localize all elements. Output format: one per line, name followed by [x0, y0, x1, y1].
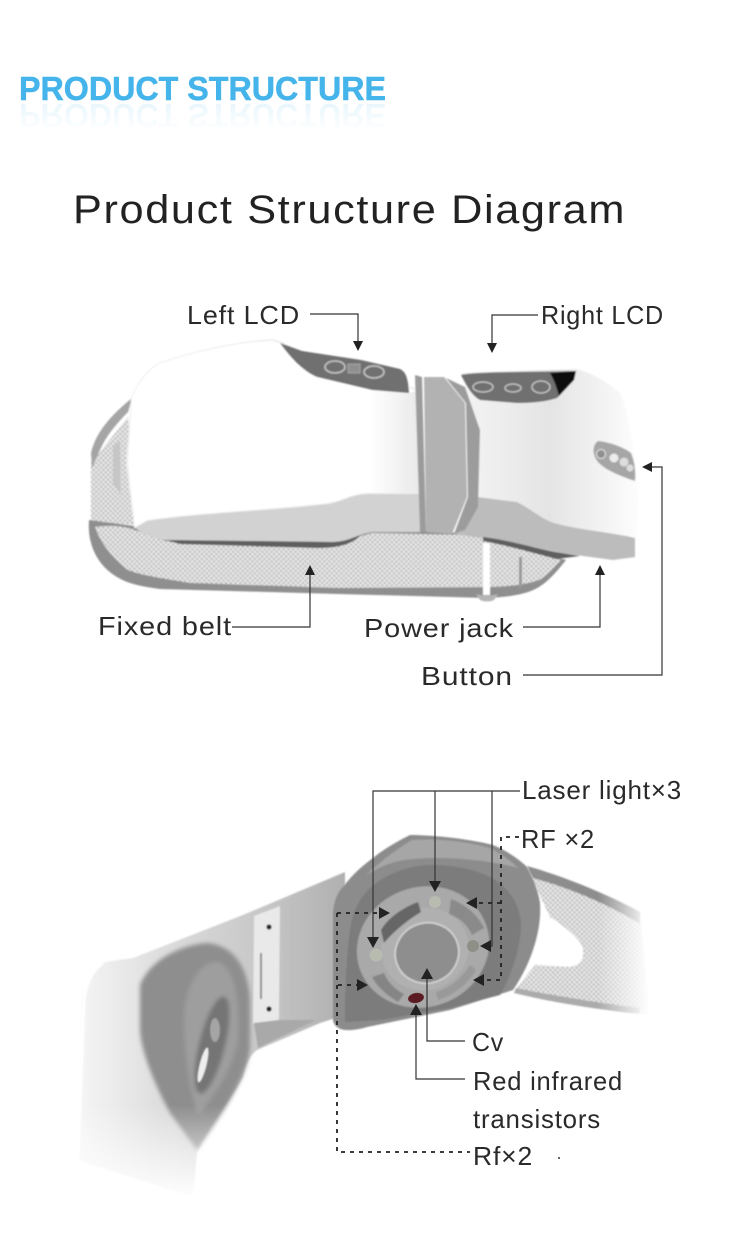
- dark gap under rim: [165, 535, 361, 548]
- heading: Product Structure Diagram: Product Structure Diagram: [73, 188, 626, 232]
- diagram: device front view: [89, 340, 639, 602]
- left housing band: [77, 872, 345, 1197]
- arrow: Fixed belt: [232, 572, 310, 627]
- centre band: [415, 375, 480, 534]
- title reflection: PRODUCT STRUCTURE: [19, 97, 386, 134]
- icon: laser lights: [370, 896, 479, 962]
- label: Rf×2: Rf×2: [473, 1141, 533, 1171]
- left LCD panel: [280, 343, 409, 393]
- dotted arrows: RF ×2: [475, 837, 519, 980]
- buttons panel: [594, 441, 635, 481]
- icon: red infrared transistor: [407, 992, 425, 1004]
- right LCD panel: [461, 371, 576, 403]
- diagram: device inner view: [60, 835, 655, 1210]
- left housing: [128, 341, 422, 527]
- title: PRODUCT STRUCTURE: [19, 70, 386, 134]
- labels and arrows: inner view: [337, 775, 682, 1171]
- dotted arrows: Rf×2: [337, 913, 470, 1152]
- arrow: Left LCD: [310, 314, 358, 343]
- lower rim right: [454, 497, 635, 560]
- left pad: [140, 943, 250, 1150]
- fixed belt: [89, 520, 566, 602]
- label: Laser light×3: Laser light×3: [522, 775, 682, 805]
- label: RF ×2: RF ×2: [521, 824, 595, 854]
- label: Right LCD: Right LCD: [541, 300, 664, 330]
- label: Fixed belt: Fixed belt: [98, 611, 232, 641]
- label: Left LCD: Left LCD: [187, 300, 300, 330]
- centre connector plate: [253, 906, 316, 1048]
- left strap: [91, 398, 135, 525]
- lens ring: [340, 868, 506, 1026]
- arrow: Power jack: [523, 572, 600, 627]
- fade of left housing: [60, 1000, 300, 1210]
- labels and arrows: inner view: transistors: [473, 1104, 601, 1134]
- arrows: Laser light: [373, 791, 520, 946]
- label: Button: Button: [421, 661, 513, 691]
- label: Power jack: Power jack: [364, 613, 514, 643]
- right strap: [514, 866, 655, 1025]
- title: PRODUCT STRUCTURE: PRODUCT STRUCTURE: [19, 70, 386, 107]
- arrow: Button: [523, 467, 662, 675]
- labels and arrows: front view: [98, 300, 664, 691]
- arrow: Right LCD: [492, 315, 538, 345]
- right housing: [461, 369, 639, 538]
- label: Cv: Cv: [472, 1027, 504, 1057]
- arrow: Cv: [427, 975, 465, 1041]
- lower rim left: [135, 493, 420, 542]
- arrow: Red infrared transistors: [416, 1012, 465, 1079]
- inner pad: [333, 835, 540, 1030]
- label: Red infrared transistors: Red infrared: [473, 1066, 623, 1096]
- left housing outline: [127, 340, 420, 527]
- left pad lens highlight: [195, 1018, 220, 1083]
